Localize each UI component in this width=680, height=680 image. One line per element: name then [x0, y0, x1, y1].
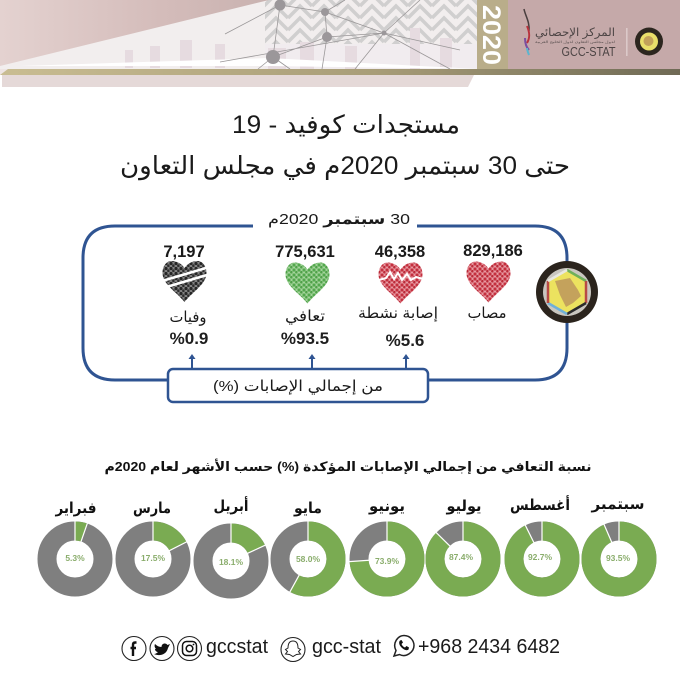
- GCC-STAT logo: لدول مجلس التعاون لدول الخليج العربية: [535, 40, 615, 44]
- donut: September: سبتمبر: [590, 496, 644, 513]
- donut: August: أغسطس: [510, 495, 570, 514]
- header banner: [0, 0, 680, 87]
- donut: August: [510, 495, 570, 587]
- footer: contact details: +968 2434 6482: [418, 636, 560, 658]
- icon: red heart with pulse: [378, 262, 423, 304]
- stat: deaths: وفيات: [170, 309, 206, 326]
- donut: September: [590, 496, 647, 587]
- donut: April: أبريل: [214, 496, 248, 515]
- stat: active cases: [358, 243, 438, 350]
- icon: twitter: [150, 636, 174, 660]
- title: مستجدات كوفيد - 19: [232, 111, 460, 139]
- donut: August: 92.7%: [528, 552, 552, 562]
- stat: recovered: 775,631: [275, 243, 335, 261]
- donut: June: يونيو: [368, 498, 405, 515]
- donut: February: [47, 500, 103, 587]
- callout: share of total cases: [168, 369, 428, 402]
- icon: red heart: [466, 262, 510, 302]
- stat: active cases: %5.6: [386, 331, 424, 350]
- donut: July: [435, 498, 491, 587]
- donut: July: يوليو: [446, 498, 482, 515]
- donut: July: 87.4%: [449, 552, 473, 562]
- footer: contact details: gccstat: [206, 636, 268, 658]
- stat: infected: 829,186: [463, 242, 523, 260]
- stat: recovered: %93.5: [281, 329, 329, 348]
- year tag 2020: 2020: [477, 5, 505, 65]
- GCC-STAT logo: [524, 9, 627, 59]
- stat: deaths: %0.9: [170, 329, 208, 348]
- icon: whatsapp: [394, 636, 414, 656]
- donut: May: 58.0%: [296, 554, 320, 564]
- emblem: GCC seal: [536, 261, 598, 323]
- stat: recovered: تعافي: [285, 308, 325, 326]
- donut: March: مارس: [133, 500, 171, 517]
- stat: deaths: 7,197: [163, 243, 205, 261]
- donut: April: 18.1%: [219, 557, 243, 567]
- icon: facebook: [122, 636, 146, 660]
- stat: deaths: [162, 243, 208, 348]
- donut: May: مايو: [293, 500, 322, 517]
- stat: infected: [463, 242, 523, 322]
- donut: June: 73.9%: [375, 556, 399, 566]
- donut: September: 93.5%: [606, 553, 630, 563]
- stat: infected: مصاب: [468, 305, 506, 322]
- stat: active cases: إصابة نشطة: [358, 305, 438, 322]
- footer: contact details: gcc-stat: [312, 636, 381, 658]
- header emblem: [635, 28, 663, 56]
- donut: March: 17.5%: [141, 553, 165, 563]
- callout: share of total cases: من إجمالي الإصابات (%): [213, 378, 383, 396]
- panel: totals frame: [83, 226, 567, 380]
- icon: green heart: [286, 262, 330, 304]
- heading: monthly recovery: نسبة التعافي من إجمالي الإصابات المؤكدة (%) حسب الأشهر لعام 2020م: [104, 458, 592, 475]
- GCC-STAT logo: GCC-STAT: [562, 44, 616, 59]
- GCC-STAT logo: المركز الإحصائي: [535, 27, 615, 40]
- icon: black heart with band: [162, 261, 207, 302]
- footer: contact details: [122, 636, 560, 662]
- title: [120, 111, 570, 181]
- donut: February: فبراير: [55, 500, 96, 517]
- stat: recovered: [275, 243, 335, 348]
- icon: snapchat: [281, 638, 305, 662]
- stat: active cases: 46,358: [375, 243, 425, 261]
- title: حتى 30 سبتمبر 2020م في مجلس التعاون: [120, 152, 570, 181]
- donut: May: [280, 500, 336, 592]
- donut: April: [203, 496, 265, 589]
- icon: instagram: [178, 636, 202, 660]
- arrows up: [188, 354, 410, 368]
- donut: June: [349, 498, 415, 587]
- date heading: 30 سبتمبر 2020م: [268, 211, 410, 228]
- donut: March: [125, 500, 187, 587]
- donut: February: 5.3%: [65, 553, 85, 563]
